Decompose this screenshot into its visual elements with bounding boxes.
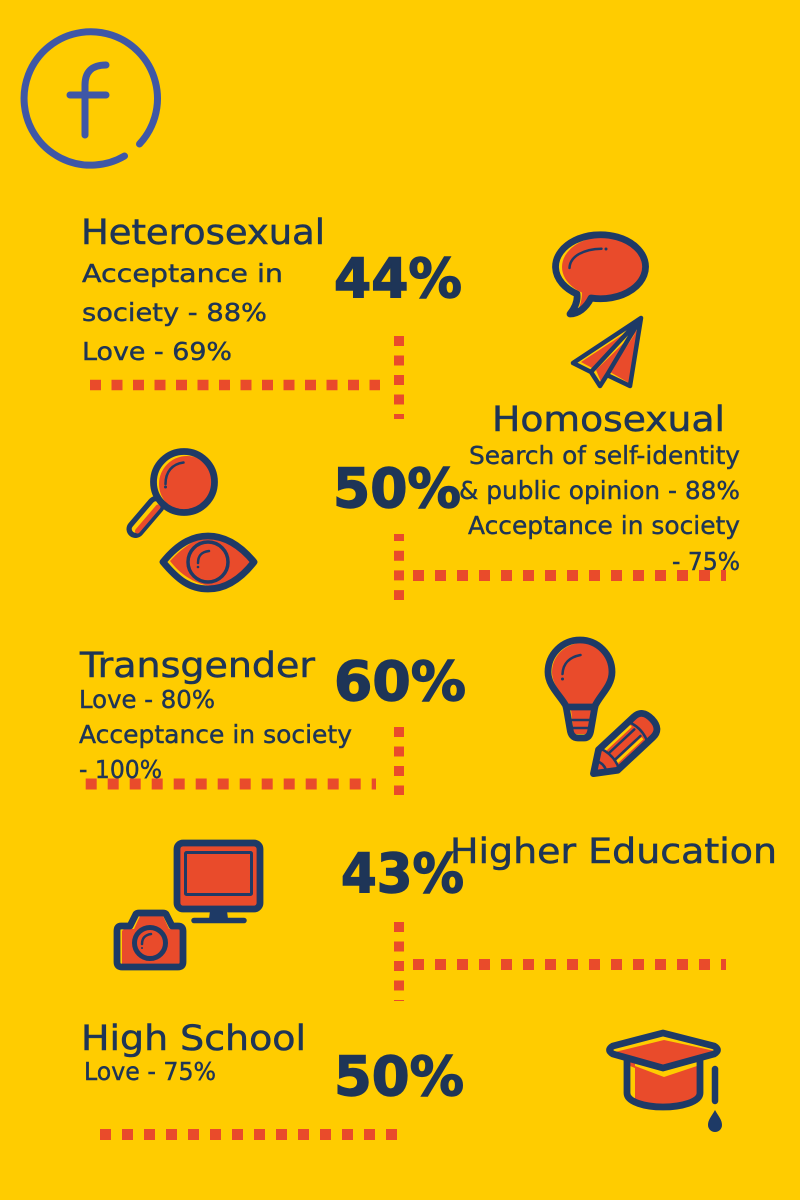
icon: monitor [177,843,260,920]
icon: graduation cap [610,1033,722,1132]
dotted connector 5 [100,1129,398,1140]
panel: higher education [341,832,777,905]
text: acceptance in society 100: Acceptance in society [79,720,352,749]
percentage 50: 50% [333,457,461,520]
icon: paper plane [573,318,641,386]
dotted connector 4 [399,922,726,1001]
percentage 44: 44% [334,247,462,310]
percentage 60: 60% [334,650,466,713]
logo: circled f [24,32,157,165]
text: acceptance in society 100 [79,720,352,784]
dotted connector 3 [86,727,399,795]
text: Acceptance in society [82,259,283,327]
text: Love 80: Love - 80% [79,685,215,714]
icon: camera [117,913,183,967]
text: acceptance in society 100: - 100% [79,755,162,784]
heading: Heterosexual: Heterosexual [81,213,325,253]
text: acceptance in society 75: - 75% [672,547,740,576]
text: search of self-identity: Search of self-identity [469,441,740,470]
heading: Transgender: Transgender [79,646,316,686]
percentage 50: 50% [334,1045,464,1108]
heading: Higher Education: Higher Education [450,832,777,872]
text: Acceptance in society: society - 88% [82,298,267,327]
panel: heterosexual [81,213,462,366]
panel: high school [81,1019,464,1108]
text: search of self-identity [459,441,740,505]
text: acceptance in society 75: Acceptance in society [468,511,740,540]
heading: Homosexual: Homosexual [492,400,725,440]
icon: magnifying glass [136,452,215,531]
icon: pencil [584,709,662,784]
text: acceptance in society 75 [468,511,740,576]
panel: homosexual [333,400,740,576]
dotted connector 1 [90,336,399,419]
percentage 43: 43% [341,842,464,905]
icon: speech bubble [556,235,646,314]
text: Love 69: Love - 69% [82,337,232,366]
icon: eye [163,536,254,589]
text: Acceptance in society: Acceptance in [82,259,283,288]
icon: light bulb [548,640,612,738]
heading: High School: High School [81,1019,306,1059]
text: Love 75: Love - 75% [84,1057,216,1086]
panel: transgender [79,646,466,784]
text: search of self-identity: & public opinion - 88% [459,476,740,505]
dotted connector 2 [399,534,726,600]
